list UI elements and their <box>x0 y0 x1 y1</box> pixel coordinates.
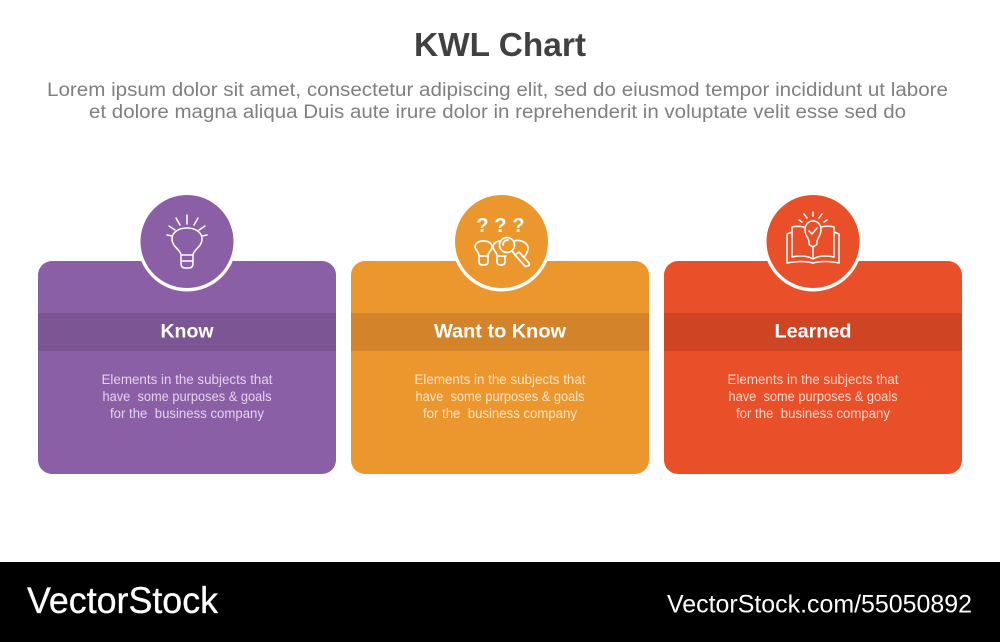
panel: know <box>38 192 336 474</box>
subtitle text: et dolore magna aliqua Duis aute irure dolor in reprehenderit in voluptate velit esse sed do <box>89 102 906 123</box>
subtitle text: Lorem ipsum dolor sit amet, consectetur adipiscing elit, sed do eiusmod tempor incididunt ut labore <box>47 80 948 101</box>
panel: want to know <box>351 192 649 474</box>
know header band <box>38 313 336 351</box>
icon: question marks: ? <box>476 215 489 237</box>
want to know heading: Want to Know <box>434 322 566 342</box>
icon: question marks: ? <box>512 215 525 237</box>
know icon circle <box>138 192 236 292</box>
footer bar <box>0 562 1000 642</box>
know description: have some purposes & goals <box>102 389 272 404</box>
icon: open book with bulb <box>787 212 839 263</box>
subtitle text <box>47 80 948 123</box>
learned description: for the business company <box>736 406 890 421</box>
want to know header band <box>351 313 649 351</box>
learned heading: Learned <box>774 322 852 342</box>
icon: bulbs and magnifier <box>475 238 529 266</box>
footer brand: VectorStock <box>27 580 218 621</box>
know description: for the business company <box>110 406 264 421</box>
icon: question marks <box>476 215 525 237</box>
want to know description <box>414 372 586 421</box>
know description: Elements in the subjects that <box>102 372 273 387</box>
learned header band <box>664 313 962 351</box>
want to know icon circle <box>452 192 551 292</box>
want to know description: have some purposes & goals <box>416 389 585 404</box>
want to know description: for the business company <box>423 406 577 421</box>
learned description <box>728 372 899 421</box>
title: KWL Chart <box>414 26 586 63</box>
icon: question marks: ? <box>494 215 507 237</box>
footer url: VectorStock.com/55050892 <box>667 590 972 618</box>
learned icon circle <box>764 192 862 292</box>
learned description: Elements in the subjects that <box>728 372 899 387</box>
panel: learned <box>664 192 962 474</box>
know description <box>102 372 273 421</box>
learned description: have some purposes & goals <box>728 389 898 404</box>
icon: light bulb <box>167 215 207 268</box>
want to know description: Elements in the subjects that <box>414 372 586 387</box>
know heading: Know <box>160 322 214 342</box>
